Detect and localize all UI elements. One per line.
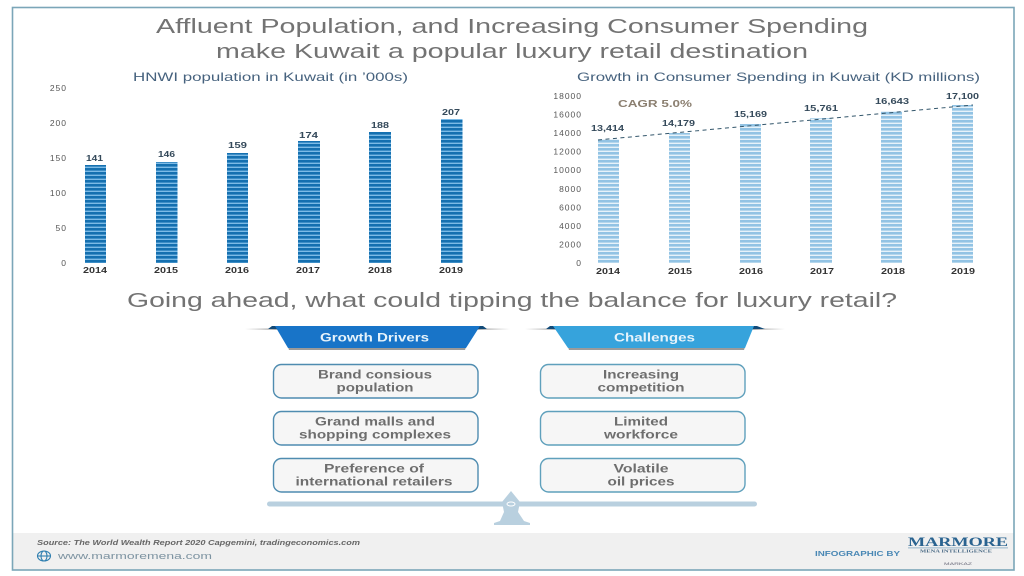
logo: Marmore: MARKAZ: [944, 561, 973, 566]
year labels: 2014: [83, 266, 108, 275]
item: brand conscious population: Brand consious: [318, 370, 432, 382]
icon: balance scale: [267, 491, 757, 525]
value labels: [86, 108, 461, 163]
year labels: [596, 267, 976, 276]
title: Affluent Population, and Increasing Consumer Spending: [156, 16, 868, 38]
y axis labels: 150: [50, 153, 67, 163]
value labels: 141: [86, 154, 104, 163]
year labels: 2015: [668, 267, 693, 276]
CAGR label: CAGR 5.0%: [618, 99, 692, 110]
y axis labels: 200: [50, 118, 67, 128]
section heading: Going ahead, what could tipping the balance for luxury retail?: [127, 290, 897, 312]
logo: Marmore: [908, 534, 1008, 566]
ribbon: Challenges: Challenges: [614, 332, 695, 344]
y axis labels: 250: [50, 83, 67, 93]
year labels: 2018: [881, 267, 906, 276]
value labels: 13,414: [591, 124, 625, 133]
year labels: 2016: [225, 266, 250, 275]
chart heading: Growth in Consumer Spending in Kuwait (KD millions): [577, 70, 980, 84]
y axis labels: 6000: [559, 202, 582, 212]
item: limited workforce: workforce: [603, 430, 678, 442]
item: grand malls: Grand malls and: [315, 416, 435, 428]
y axis labels: 50: [56, 223, 67, 233]
website: www.marmoremena.com: [56, 551, 212, 561]
y axis labels: 2000: [559, 240, 582, 250]
logo: Marmore: MENA INTELLIGENCE: [920, 548, 992, 554]
y axis labels: [553, 91, 582, 268]
y axis labels: 4000: [559, 221, 582, 231]
item: volatile oil prices: oil prices: [608, 476, 674, 488]
year labels: 2016: [739, 267, 764, 276]
chart: HNWI population: [50, 70, 464, 275]
logo: Marmore: MARMORE: [908, 534, 1008, 549]
year labels: 2015: [154, 266, 179, 275]
ribbon: Growth Drivers: Growth Drivers: [320, 332, 429, 344]
value labels: 15,169: [734, 110, 768, 119]
value labels: 159: [228, 141, 248, 150]
item: increasing competition: competition: [598, 382, 684, 394]
y axis labels: 10000: [553, 165, 582, 175]
bars: [598, 105, 973, 263]
item: limited workforce: Limited: [614, 416, 668, 428]
chart: consumer spending: [553, 70, 980, 276]
year labels: 2017: [810, 267, 835, 276]
value labels: 174: [299, 131, 319, 140]
title: [156, 16, 868, 63]
ribbon: Challenges: [525, 326, 785, 350]
y axis labels: 8000: [559, 184, 582, 194]
y axis labels: 12000: [553, 146, 582, 156]
value labels: 207: [442, 108, 461, 117]
value labels: 15,761: [804, 104, 839, 113]
panel: growth driver items: [274, 364, 478, 492]
item: volatile oil prices: Volatile: [614, 464, 668, 476]
value labels: 188: [371, 121, 390, 130]
item: international retailers: Preference of: [324, 464, 424, 476]
item: grand malls: [274, 412, 478, 445]
item: brand conscious population: population: [336, 382, 414, 394]
value labels: 17,100: [946, 92, 980, 101]
value labels: 16,643: [875, 97, 910, 106]
item: increasing competition: [540, 364, 745, 398]
item: international retailers: international retailers: [296, 476, 452, 488]
item: international retailers: [274, 458, 478, 492]
chart heading: HNWI population in Kuwait (in ’000s): [133, 70, 408, 84]
credit label: INFOGRAPHIC BY: [815, 549, 900, 558]
ribbon: Growth Drivers: [245, 326, 510, 350]
item: limited workforce: [540, 412, 745, 445]
year labels: 2014: [596, 267, 621, 276]
year labels: 2019: [951, 267, 976, 276]
CAGR trend line: [598, 105, 973, 140]
y axis labels: 0: [576, 258, 582, 268]
year labels: 2018: [368, 266, 393, 275]
year labels: 2017: [296, 266, 321, 275]
year labels: 2019: [439, 266, 464, 275]
value labels: 14,179: [662, 119, 696, 128]
footer band: [13, 533, 1014, 570]
icon: globe: [38, 551, 50, 561]
title: make Kuwait a popular luxury retail destination: [216, 41, 808, 63]
source note: Source: The World Wealth Report 2020 Capgemini, tradingeconomics.com: [37, 540, 360, 547]
y axis labels: 0: [61, 258, 67, 268]
year labels: [83, 266, 464, 275]
panel: challenge items: [540, 364, 745, 492]
bars: [85, 119, 462, 263]
item: volatile oil prices: [540, 458, 745, 492]
y axis labels: [50, 83, 67, 268]
value labels: [591, 92, 980, 133]
item: brand conscious population: [274, 364, 478, 398]
y axis labels: 100: [50, 188, 67, 198]
y axis labels: 18000: [553, 91, 582, 101]
value labels: 146: [158, 150, 176, 159]
item: grand malls: shopping complexes: [299, 430, 451, 442]
y axis labels: 14000: [553, 128, 582, 138]
item: increasing competition: Increasing: [603, 370, 679, 382]
y axis labels: 16000: [553, 110, 582, 120]
